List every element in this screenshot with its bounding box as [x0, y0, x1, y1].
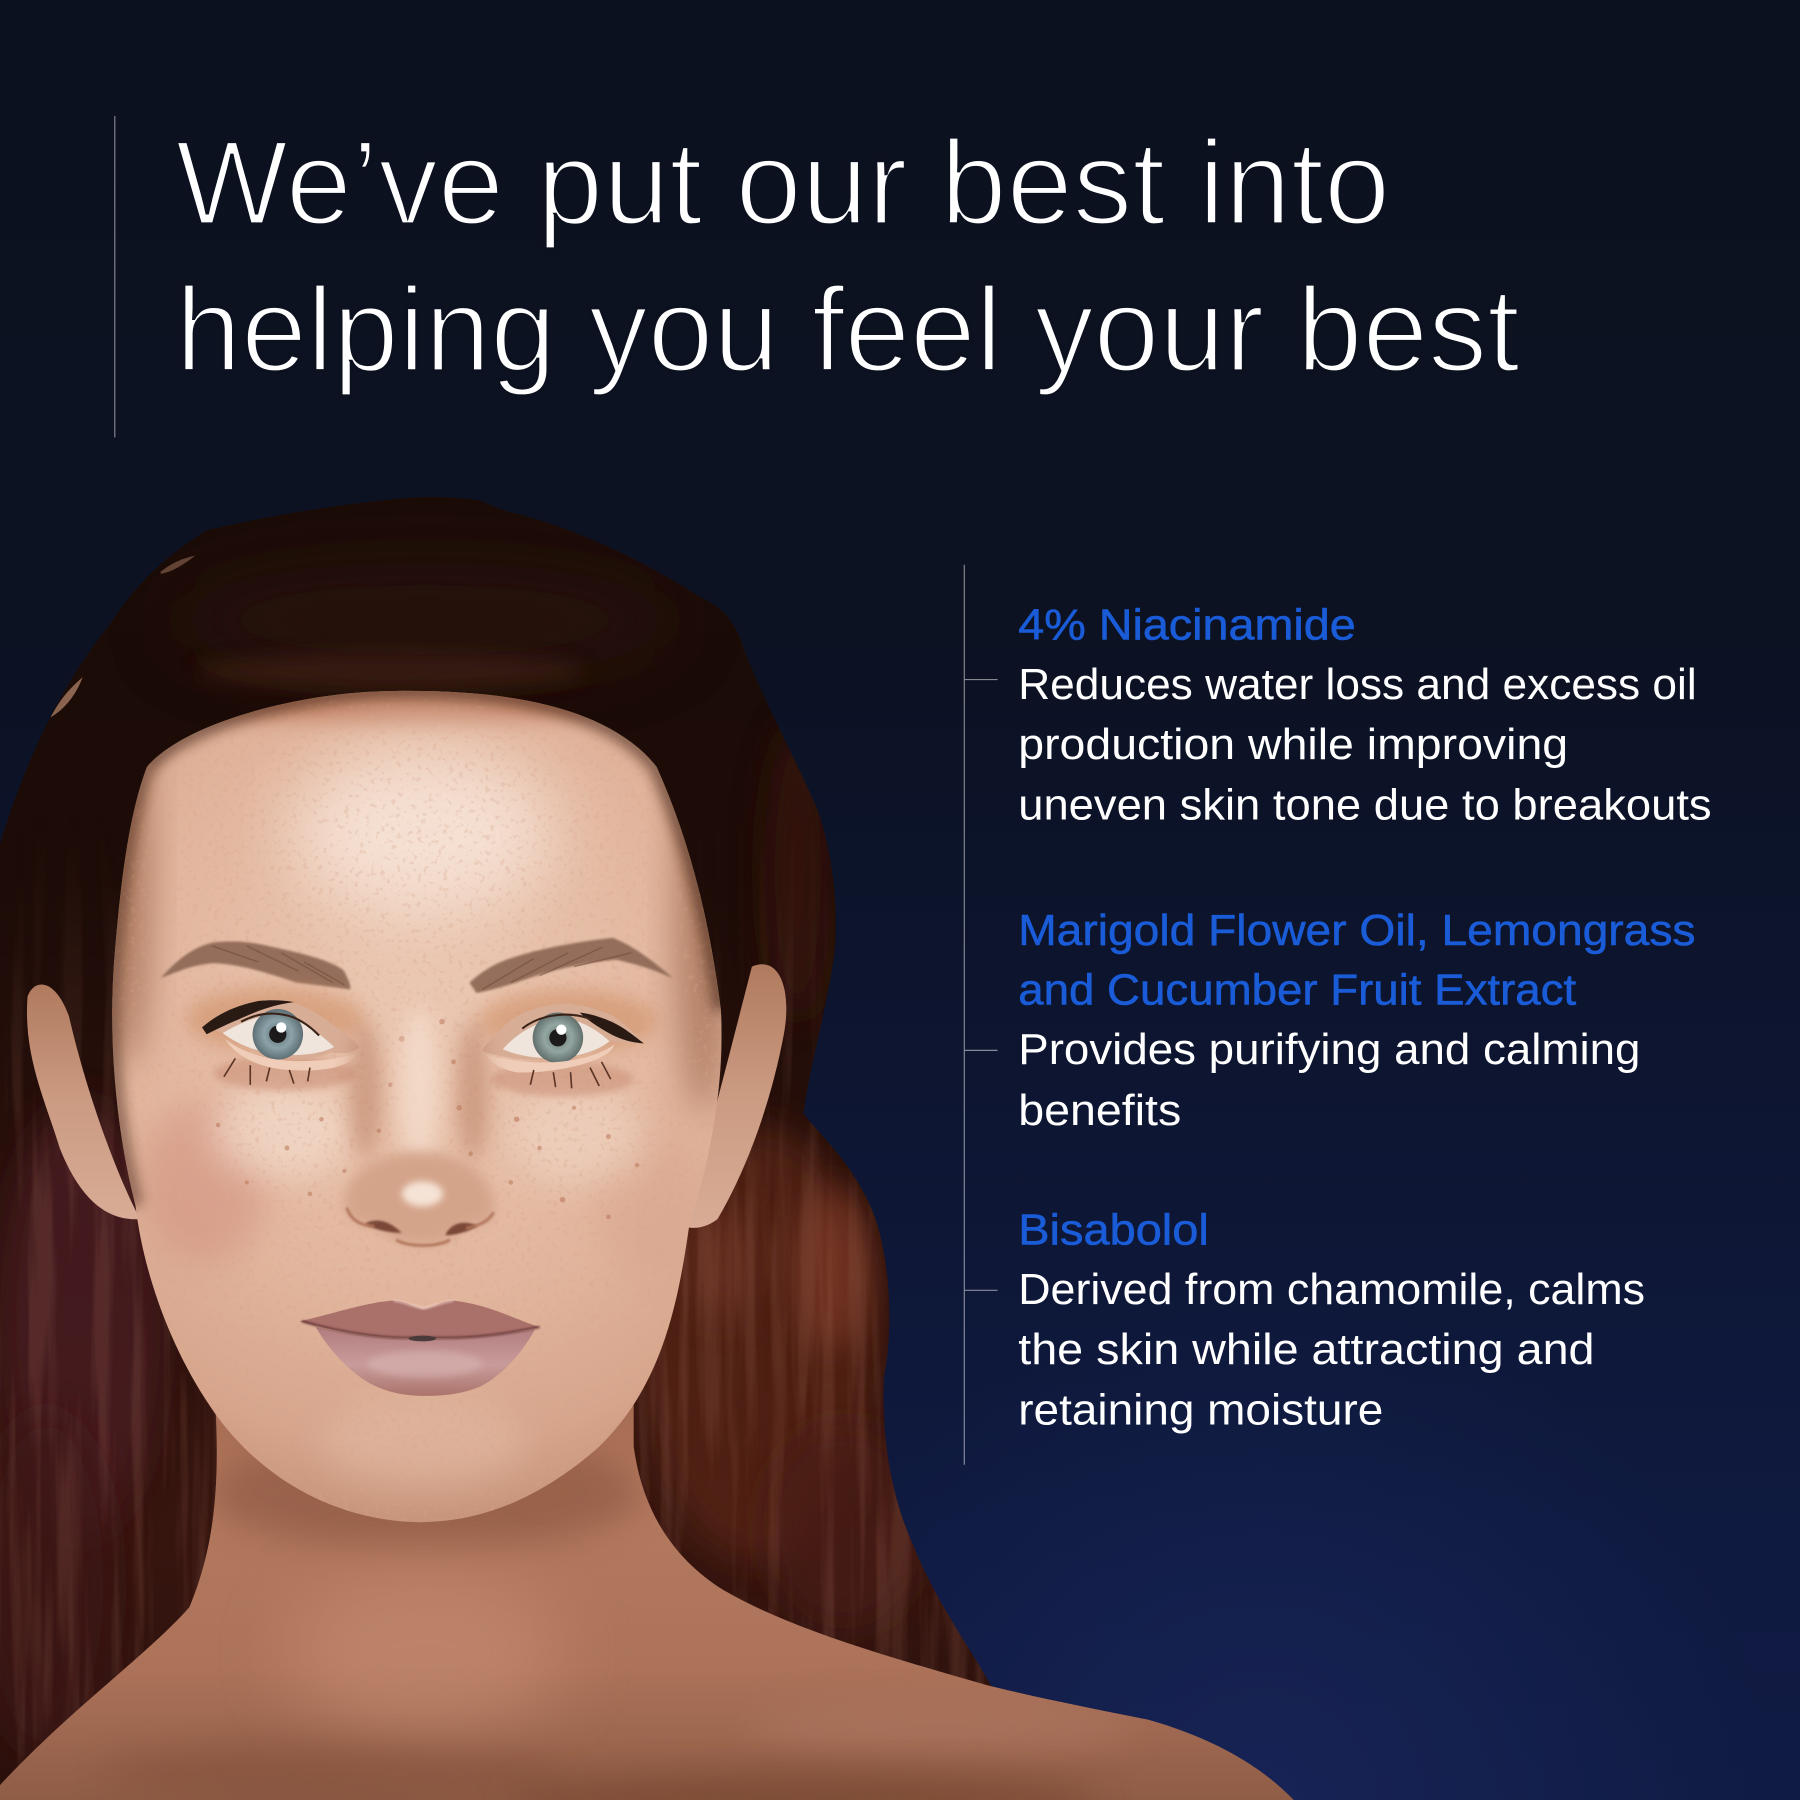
left eye: [186, 987, 365, 1091]
right ear: [683, 964, 786, 1228]
ingredient: niacinamide: production while improving: [1018, 721, 1568, 769]
title: helping you feel your best: [176, 264, 1520, 397]
title: [176, 117, 1520, 397]
hair: [0, 482, 1033, 1800]
neck and shoulders: [0, 1404, 1294, 1800]
ingredient: marigold, lemongrass, cucumber: Provides purifying and calming: [1018, 1026, 1640, 1074]
title rule: [114, 116, 115, 437]
left eyebrow: [161, 942, 350, 990]
left ear: [27, 984, 140, 1219]
face: [101, 682, 735, 1527]
ingredient: marigold, lemongrass, cucumber: [1018, 907, 1696, 1135]
ingredients panel: [964, 565, 1712, 1465]
nose: [344, 1010, 495, 1245]
ingredient: marigold, lemongrass, cucumber: Marigold Flower Oil, Lemongrass: [1018, 907, 1696, 955]
freckles: [216, 1019, 639, 1219]
ingredient: marigold, lemongrass, cucumber: benefits: [1018, 1087, 1181, 1135]
ingredient: niacinamide: Reduces water loss and excess oil: [1018, 661, 1697, 709]
ingredient: niacinamide: [1018, 601, 1712, 830]
ingredient: bisabolol: the skin while attracting and: [1018, 1326, 1595, 1374]
timeline rule: [964, 565, 998, 1465]
ingredient: bisabolol: retaining moisture: [1018, 1387, 1383, 1435]
ingredient: niacinamide: 4% Niacinamide: [1018, 601, 1356, 649]
ingredient: bisabolol: Derived from chamomile, calms: [1018, 1266, 1645, 1314]
lips: [300, 1301, 540, 1396]
ingredient: bisabolol: [1018, 1206, 1645, 1435]
title: We’ve put our best into: [176, 117, 1390, 250]
ingredient: niacinamide: uneven skin tone due to breakouts: [1018, 782, 1712, 830]
right eyebrow: [470, 938, 673, 993]
ingredient: marigold, lemongrass, cucumber: and Cucumber Fruit Extract: [1018, 966, 1576, 1014]
portrait of woman: [0, 482, 1309, 1800]
right eye: [479, 990, 658, 1096]
ingredient: bisabolol: Bisabolol: [1018, 1206, 1209, 1254]
